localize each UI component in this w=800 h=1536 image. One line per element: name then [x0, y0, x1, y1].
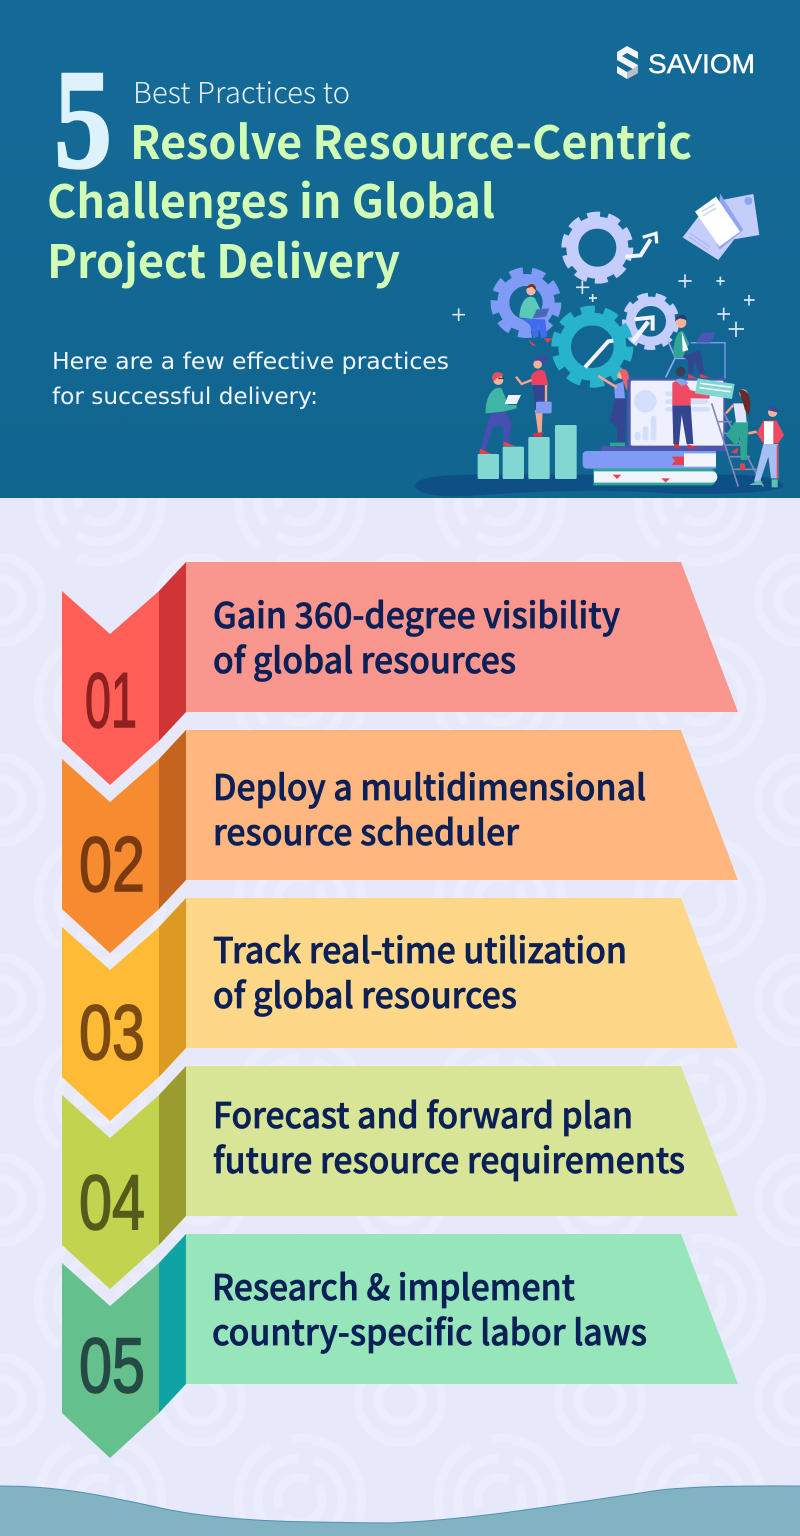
step 02 panel: [186, 730, 738, 880]
step 01 number: 01: [85, 656, 137, 744]
step 03 number: 03: [79, 988, 145, 1076]
step 05 text: Research & implement: [212, 1260, 575, 1311]
step 02 text: Deploy a multidimensional: [213, 760, 646, 811]
figure: man in red jacket: [748, 406, 784, 487]
panel: light patterned background: [0, 498, 800, 1536]
step 03 text: Track real-time utilization: [213, 923, 627, 974]
figure: person at desk: [666, 315, 725, 378]
illustration: team with gears, charts and books: [415, 193, 784, 496]
intro text: Here are a few effective practices: [52, 349, 449, 375]
step 01 side: [159, 562, 186, 741]
note card: [695, 378, 735, 399]
step 03 chevron: [62, 927, 159, 1121]
step 03 text: of global resources: [213, 968, 517, 1019]
ladder: [712, 403, 763, 487]
big numeral 5: 5: [54, 40, 112, 198]
icon: gear light small: [625, 295, 677, 347]
step 02 number: 02: [79, 820, 145, 908]
figure: man at screen: [672, 367, 710, 448]
footer wave: [0, 1486, 800, 1536]
icon: gear top: [565, 215, 630, 280]
step 04 chevron: [62, 1095, 159, 1289]
title: Project Delivery: [47, 226, 400, 292]
figure: man with cap: [479, 372, 521, 454]
step 05: [62, 1234, 738, 1458]
step 01 text: Gain 360-degree visibility: [213, 588, 620, 639]
books: [583, 446, 726, 485]
screen dashboard: [627, 378, 726, 448]
figure: woman with bag: [516, 355, 552, 437]
step 04 text: future resource requirements: [213, 1133, 685, 1184]
step 05 number: 05: [79, 1321, 145, 1409]
step 02 side: [159, 730, 186, 909]
logo: Saviom: [617, 46, 755, 79]
intro text: for successful delivery:: [52, 384, 318, 410]
step 01: [62, 562, 738, 785]
figure: woman pushing gear: [598, 369, 629, 447]
intro text: [52, 349, 449, 410]
icon: bar steps: [478, 425, 577, 479]
logo: Saviom: SAVIOM: [648, 49, 755, 79]
step 02 text: resource scheduler: [213, 805, 520, 856]
step 01 text: of global resources: [213, 633, 516, 684]
step 03 side: [159, 898, 186, 1077]
title: Resolve Resource-Centric: [130, 107, 692, 173]
title: [47, 70, 692, 292]
step 05 panel: [186, 1234, 738, 1384]
title: Best Practices to: [133, 70, 350, 112]
title: Challenges in Global: [47, 166, 495, 232]
step 04 panel: [186, 1066, 738, 1216]
icon: gear teal: [555, 310, 629, 384]
step 04 number: 04: [79, 1158, 145, 1246]
step 04 side: [159, 1066, 186, 1245]
step 01 chevron: [62, 591, 159, 785]
icon: gear blue: [494, 271, 558, 334]
icon: documents: [683, 193, 759, 260]
icons: sparkles: [452, 274, 755, 337]
step 05 chevron: [62, 1263, 159, 1458]
ground shadow: [415, 475, 783, 496]
step 05 side: [159, 1234, 186, 1413]
step 03: [62, 898, 738, 1121]
step 01 panel: [186, 562, 738, 712]
step 02: [62, 730, 738, 953]
figure: person on gear: [519, 284, 553, 346]
step 04 text: Forecast and forward plan: [213, 1088, 633, 1139]
icon: arrows on gears: [585, 233, 657, 367]
step 03 panel: [186, 898, 738, 1048]
step 02 chevron: [62, 759, 159, 953]
panel: header background: [0, 0, 800, 498]
step 05 text: country-specific labor laws: [212, 1305, 647, 1356]
step 04: [62, 1066, 738, 1289]
figure: woman on ladder: [726, 389, 750, 470]
